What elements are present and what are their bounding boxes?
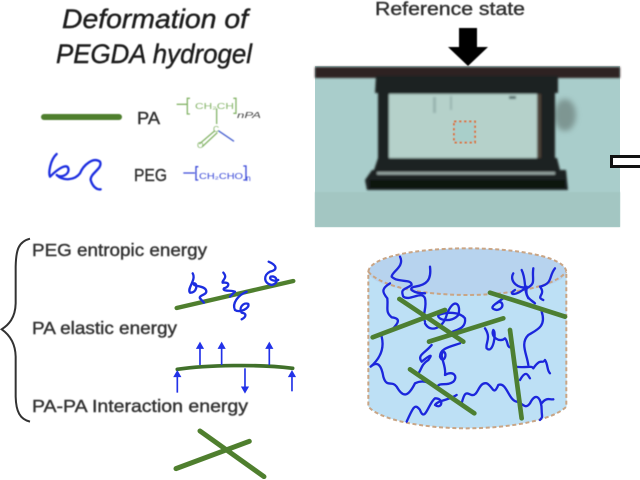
brace [2, 239, 30, 422]
icon: PA rod with PEG coils [177, 262, 293, 319]
PA chemical structure: nPA [237, 110, 262, 120]
PA rods [373, 293, 565, 418]
PA chemical structure [177, 98, 262, 150]
legend: PA and PEG [44, 98, 262, 189]
arrow: black down arrow [448, 28, 488, 66]
cylinder top [368, 248, 566, 295]
cylinder body [368, 272, 567, 428]
icon: PA rod [44, 114, 119, 120]
label: PA: PA [137, 108, 160, 128]
title: PEGDA hydrogel [56, 39, 253, 69]
dashed square marker [454, 122, 475, 142]
dashed outline [368, 248, 566, 428]
energy labels [32, 240, 248, 416]
clamp frame [365, 76, 568, 190]
icon: PEG coil [49, 154, 101, 189]
text: PEG entropic energy: PEG entropic energy [32, 240, 207, 260]
PEG chemical structure [183, 166, 251, 183]
label: PEG: PEG [134, 165, 167, 185]
PEG chemical structure: CH₂CHO [199, 172, 243, 181]
PEG chains [371, 257, 555, 422]
gel sample window [389, 94, 537, 158]
photo background [315, 66, 620, 227]
PA chemical structure: C [213, 124, 219, 134]
text: PA-PA interaction energy: PA-PA Interaction energy [32, 396, 248, 416]
icon: crossed PA rods [176, 431, 264, 477]
title [56, 4, 253, 69]
PA chemical structure: CH₂CH [195, 101, 234, 111]
cylinder hydrogel diagram [368, 248, 567, 428]
PA chemical structure: O [197, 140, 204, 150]
arrow: cropped outline arrow [612, 156, 640, 166]
photo panel: reference state [315, 66, 620, 227]
top plate [315, 67, 620, 78]
icon: PA rod with force arrows [175, 343, 295, 393]
title: Deformation of [62, 4, 251, 34]
PEG chemical structure: n [246, 173, 251, 183]
text: PA elastic energy: PA elastic energy [32, 318, 177, 338]
